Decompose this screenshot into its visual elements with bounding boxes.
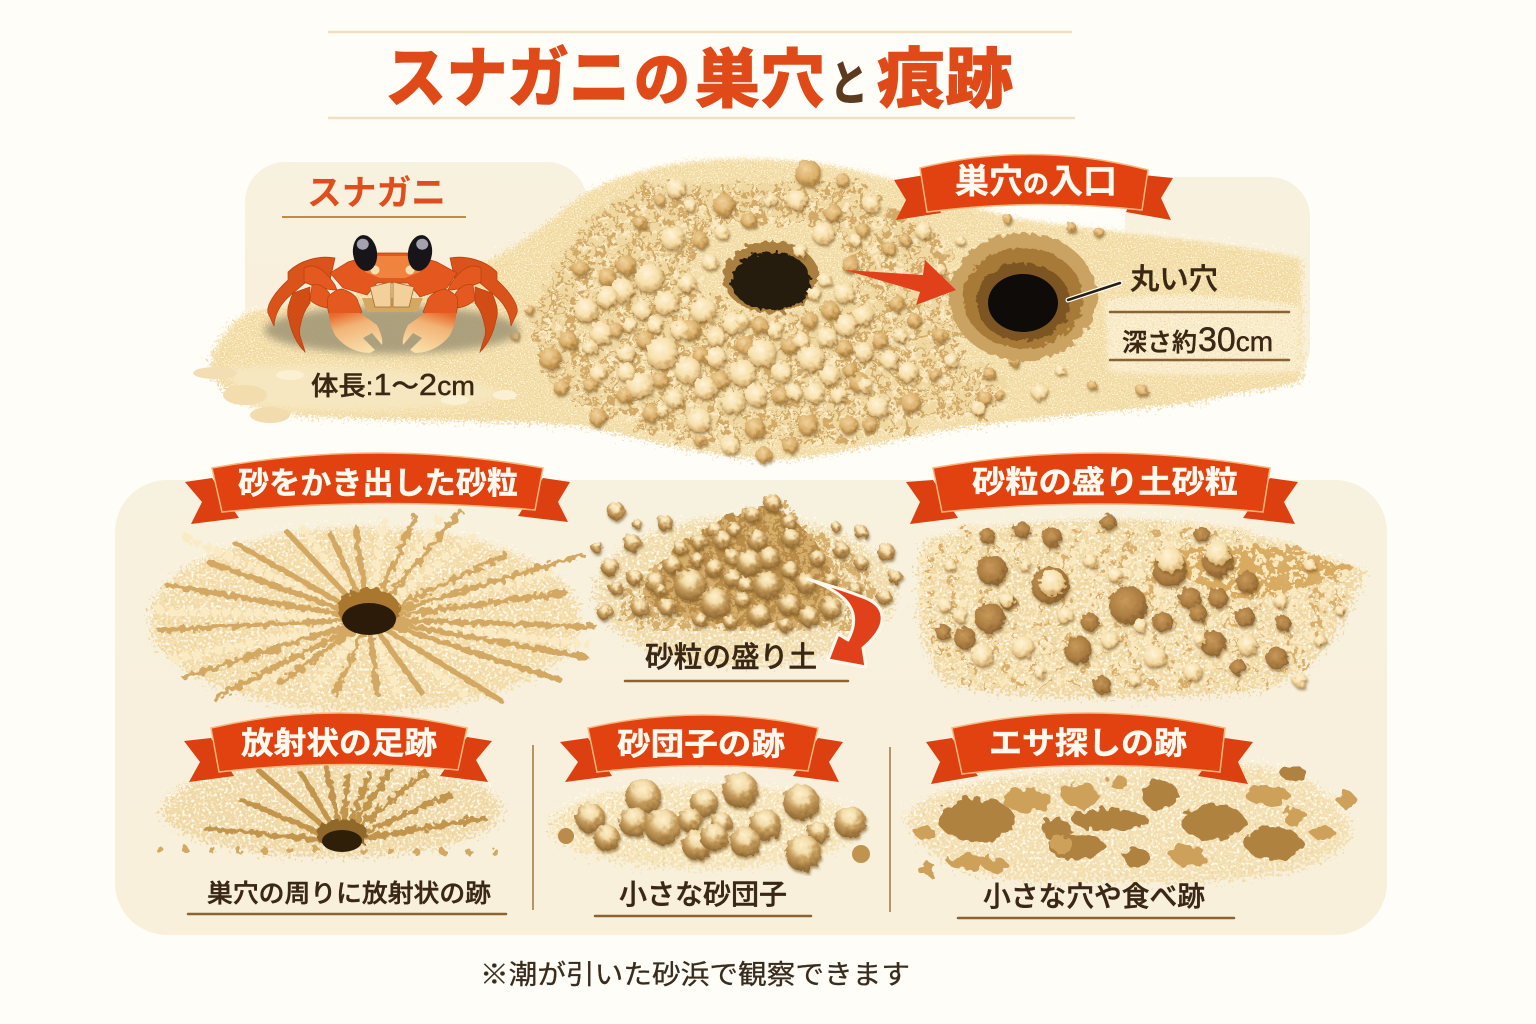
panel: burrow card bbox=[1125, 177, 1310, 387]
title: の bbox=[634, 48, 690, 113]
banner: scraped sand: 砂をかき出した砂粒 bbox=[238, 466, 518, 501]
brown grains bbox=[935, 514, 1291, 694]
title: 巣穴 bbox=[695, 44, 825, 116]
banner: sand balls bbox=[560, 715, 843, 782]
balls bbox=[575, 772, 866, 871]
sand grains: mound bbox=[510, 160, 1148, 463]
light grains bbox=[938, 541, 1345, 687]
caption: radial footprints: 巣穴の周りに放射状の跡 bbox=[207, 880, 491, 908]
scene: feeding marks bbox=[905, 762, 1356, 881]
scene: radial footprints bbox=[160, 760, 505, 856]
title: スナガニ bbox=[385, 41, 630, 115]
sand mound: top scene bbox=[193, 159, 1302, 458]
banner: feeding marks: エサ探しの跡 bbox=[989, 726, 1187, 761]
curved arrow to mound label bbox=[808, 579, 882, 667]
panel: crab card bbox=[245, 162, 587, 382]
title: 痕跡 bbox=[877, 42, 1013, 116]
arrow to burrow entrance bbox=[845, 260, 956, 305]
banner: scraped sand bbox=[185, 453, 570, 524]
icon: ghost crab bbox=[264, 234, 520, 354]
title bbox=[328, 32, 1075, 118]
banner: radial footprints: 放射状の足跡 bbox=[241, 726, 437, 761]
banner: burrow entrance bbox=[894, 154, 1173, 220]
divider bbox=[889, 747, 891, 912]
banner: mound grains: 砂粒の盛り土砂粒 bbox=[972, 465, 1238, 500]
scene: sand balls bbox=[550, 772, 870, 871]
scene: radial scratch marks bbox=[150, 512, 595, 710]
callout: depth: 30cm bbox=[1198, 321, 1273, 359]
banner: radial footprints bbox=[184, 713, 492, 782]
label: crab name: スナガニ bbox=[307, 174, 446, 213]
text: body length: 体長:1～2cm bbox=[311, 367, 475, 402]
caption: sand balls: 小さな砂団子 bbox=[619, 879, 787, 910]
callout: round hole bbox=[1068, 263, 1218, 300]
callout: round hole: 丸い穴 bbox=[1130, 263, 1218, 296]
callout: depth bbox=[1110, 312, 1289, 360]
banner: mound grains bbox=[906, 453, 1298, 524]
footer note: ※潮が引いた砂浜で観察できます bbox=[480, 960, 910, 990]
callout: depth: 深さ約 bbox=[1122, 329, 1197, 357]
panel: traces bbox=[115, 480, 1387, 935]
scene: scattered mound grains bbox=[919, 514, 1365, 697]
burrow entrance close-up bbox=[949, 233, 1097, 361]
grains bbox=[591, 494, 902, 632]
burrow hole in mound bbox=[723, 241, 819, 313]
crab left half bbox=[268, 257, 382, 353]
pebble texture on mound bbox=[539, 188, 1006, 441]
divider bbox=[532, 745, 534, 910]
banner: sand balls: 砂団子の跡 bbox=[617, 727, 785, 762]
caption: feeding marks: 小さな穴や食べ跡 bbox=[983, 881, 1205, 912]
label: mound: 砂粒の盛り土 bbox=[645, 641, 817, 674]
banner: burrow entrance: 巣穴の入口 bbox=[955, 163, 1117, 201]
title: と bbox=[830, 58, 868, 111]
scene: sand grain mound bbox=[591, 494, 902, 665]
banner: feeding marks bbox=[926, 713, 1253, 784]
feeding blobs bbox=[915, 764, 1356, 876]
